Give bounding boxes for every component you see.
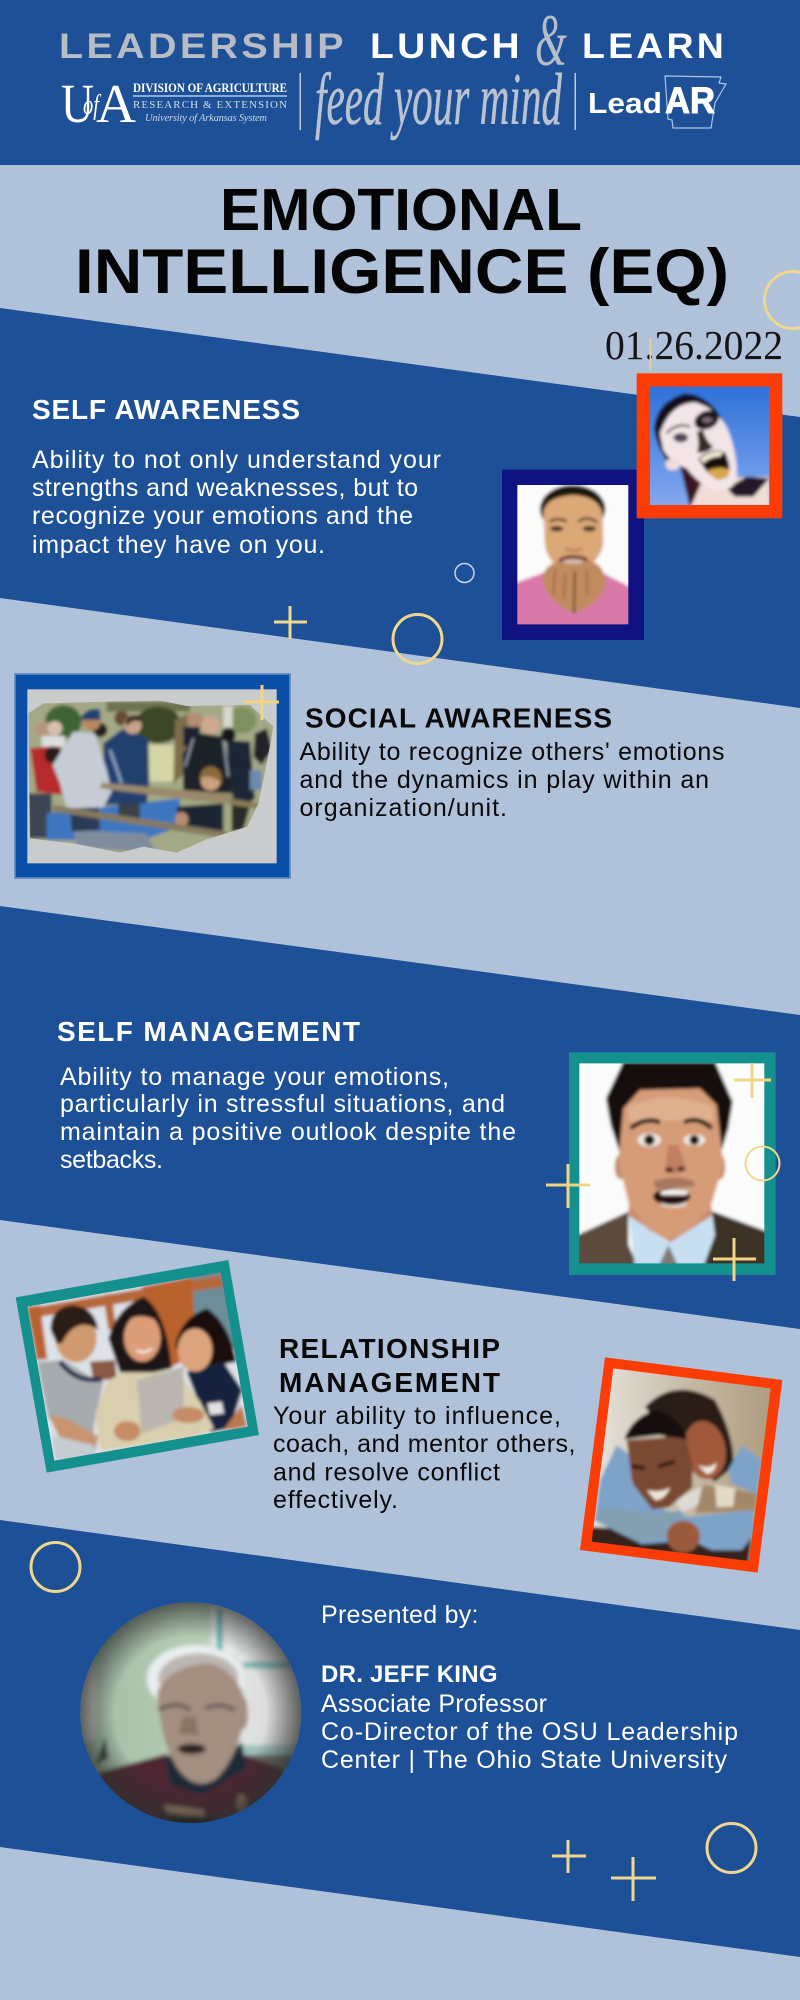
presenter title: Center | The Ohio State University: [321, 1746, 728, 1774]
title line one: EMOTIONAL: [220, 177, 582, 243]
description: coach, and mentor others,: [273, 1430, 576, 1458]
blue frame: [15, 674, 290, 878]
photo: team lifting logs: [15, 674, 290, 878]
photo: family reading: [16, 1260, 259, 1473]
decorative ring: man right: [746, 1146, 780, 1180]
description: setbacks.: [60, 1146, 163, 1174]
scene: [592, 1368, 771, 1561]
description: impact they have on you.: [32, 531, 325, 559]
university of arkansas logo: [61, 73, 287, 134]
social awareness text: [300, 702, 724, 822]
decorative ring: top right: [764, 272, 800, 328]
teal frame: [569, 1052, 776, 1275]
description: Ability to not only understand your: [32, 446, 441, 474]
arkansas outline: [665, 76, 726, 128]
description: and the dynamics in play within an: [300, 766, 709, 794]
description: Ability to manage your emotions,: [60, 1063, 449, 1091]
heading: RELATIONSHIP: [279, 1333, 500, 1364]
description: [60, 1063, 516, 1174]
script ampersand: &: [535, 0, 567, 81]
scene: [27, 700, 277, 857]
description: [300, 738, 724, 822]
decorative plus: band edge: [274, 606, 307, 639]
description: recognize your emotions and the: [32, 502, 413, 530]
paper backing: [27, 689, 277, 863]
description: effectively.: [273, 1486, 398, 1514]
diagonal band: presenter: [0, 1520, 800, 1957]
orange frame: [580, 1357, 782, 1573]
header series title: [59, 0, 727, 81]
decorative plus: man upper right: [734, 1063, 771, 1098]
university system: University of Arkansas System: [145, 113, 267, 124]
decorative plus: man left: [546, 1164, 590, 1208]
diagonal band: self awareness: [0, 308, 800, 708]
description: particularly in stressful situations, and: [60, 1090, 505, 1118]
relationship management text: [273, 1333, 576, 1514]
division of agriculture: DIVISION OF AGRICULTURE: [133, 80, 287, 95]
learn wordmark: LEARN: [582, 27, 727, 66]
leadar logo: [588, 76, 726, 128]
u letter: U: [61, 73, 94, 134]
scene: [27, 1272, 248, 1460]
ar wordmark: AR: [665, 80, 715, 121]
presenter text: [321, 1601, 738, 1774]
photo: laughing couple: [580, 1357, 782, 1573]
description: [273, 1402, 576, 1514]
description: Ability to recognize others' emotions: [300, 738, 724, 766]
photo: fearful woman: [502, 373, 782, 640]
orange frame: [637, 373, 782, 518]
presenter title: Co-Director of the OSU Leadership: [321, 1718, 738, 1746]
portrait: [514, 482, 632, 628]
feed your mind script: feed your mind: [315, 59, 563, 141]
self awareness text: [32, 394, 441, 559]
decorative plus: on group photo: [243, 685, 279, 720]
presenter name: DR. JEFF KING: [321, 1661, 498, 1688]
presenter title: Associate Professor: [321, 1690, 547, 1718]
photo: shocked man: [569, 1052, 776, 1275]
lunch wordmark: LUNCH: [370, 27, 523, 66]
presenter title: [321, 1690, 738, 1774]
decorative plus: man bottom: [713, 1238, 756, 1281]
decorative plus: bottom small: [552, 1840, 586, 1873]
photo vignette: [80, 1602, 302, 1824]
decorative ring: band edge: [393, 614, 442, 664]
header bar: [0, 0, 800, 165]
description: maintain a positive outlook despite the: [60, 1118, 516, 1146]
date: 01.26.2022: [605, 322, 783, 368]
description: and resolve conflict: [273, 1458, 500, 1486]
decorative ring: presenter band left: [31, 1542, 80, 1592]
main title: [75, 177, 729, 307]
heading: SOCIAL AWARENESS: [305, 702, 612, 734]
description: Your ability to influence,: [273, 1402, 561, 1430]
navy frame: [502, 470, 644, 640]
presenter photo: [77, 1600, 307, 1828]
research and extension: RESEARCH & EXTENSION: [133, 99, 287, 111]
heading line two: MANAGEMENT: [279, 1367, 500, 1398]
decorative ring: bottom right: [707, 1824, 756, 1872]
self management text: [57, 1016, 516, 1174]
description: strengths and weaknesses, but to: [32, 474, 418, 502]
description: [32, 446, 441, 559]
of letters: of: [83, 90, 101, 121]
portrait: [650, 386, 770, 505]
description: organization/unit.: [300, 794, 507, 822]
teal frame: [16, 1260, 259, 1473]
heading: SELF MANAGEMENT: [57, 1016, 360, 1047]
diagonal band: self management: [0, 906, 800, 1329]
a letter: A: [96, 73, 136, 134]
decorative plus stem by date: [650, 338, 651, 370]
leadership wordmark: LEADERSHIP: [59, 27, 347, 66]
decorative plus: bottom large: [611, 1857, 656, 1901]
title line two: INTELLIGENCE (EQ): [75, 237, 729, 307]
logo rule: [133, 95, 287, 97]
portrait: [576, 1060, 768, 1267]
presented by label: Presented by:: [321, 1601, 478, 1629]
decorative ring: small white: [455, 564, 474, 582]
heading: SELF AWARENESS: [32, 394, 300, 425]
lead wordmark: Lead: [588, 88, 662, 120]
